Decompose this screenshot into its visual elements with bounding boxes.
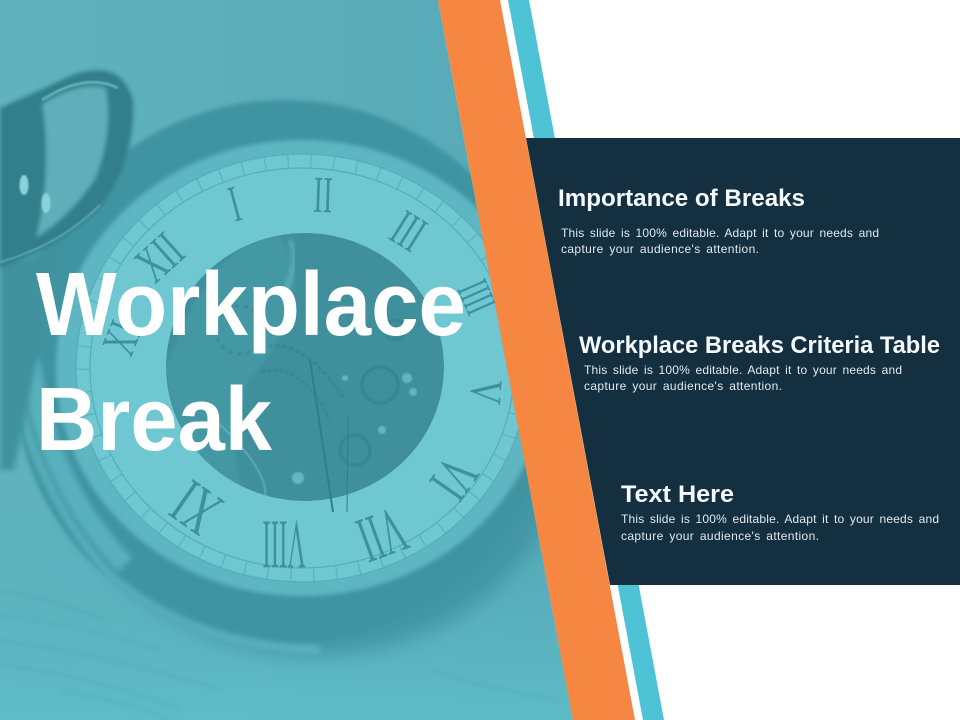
watch hands	[310, 360, 348, 512]
pendant bow	[0, 70, 133, 470]
photo panel: pocket watch	[0, 0, 600, 720]
roman numerals: XII	[125, 222, 195, 294]
roman numerals: VII	[348, 492, 416, 576]
text block: workplace breaks criteria table: This slide is 100% editable. Adapt it to your needs and	[584, 363, 902, 377]
text block: workplace breaks criteria table	[579, 332, 940, 393]
title	[36, 255, 466, 470]
text block: workplace breaks criteria table: Workplace Breaks Criteria Table	[579, 332, 940, 359]
text block: text here	[621, 481, 939, 543]
watch movement	[166, 233, 444, 501]
text block: text here: capture your audience's attention.	[621, 529, 819, 543]
text block: workplace breaks criteria table: capture your audience's attention.	[584, 379, 782, 393]
orange diagonal band	[438, 0, 635, 720]
cyan diagonal stripe	[508, 0, 664, 720]
text block: importance of breaks: This slide is 100% editable. Adapt it to your needs and	[561, 226, 879, 240]
roman numerals: V	[460, 378, 512, 406]
title: Workplace	[36, 255, 466, 355]
roman numerals: IIII	[448, 273, 506, 321]
text block: importance of breaks: Importance of Breaks	[558, 185, 805, 212]
watch case	[12, 100, 565, 655]
roman numerals: XI	[158, 466, 234, 550]
text block: importance of breaks	[558, 185, 879, 256]
roman numerals: VI	[417, 445, 491, 511]
text block: text here: Text Here	[621, 481, 734, 508]
roman numerals	[102, 178, 502, 568]
roman numerals: II	[312, 167, 334, 225]
watch dial	[76, 154, 528, 582]
panel: navy content	[526, 138, 960, 585]
roman numerals: VIII	[262, 505, 306, 583]
wood table streaks	[0, 590, 560, 720]
roman numerals: III	[381, 200, 435, 264]
roman numerals: I	[223, 176, 247, 234]
roman numerals: XI	[92, 314, 152, 362]
text block: text here: This slide is 100% editable. Adapt it to your needs and	[621, 512, 939, 526]
title: Break	[36, 370, 273, 470]
text block: importance of breaks: capture your audience's attention.	[561, 242, 759, 256]
